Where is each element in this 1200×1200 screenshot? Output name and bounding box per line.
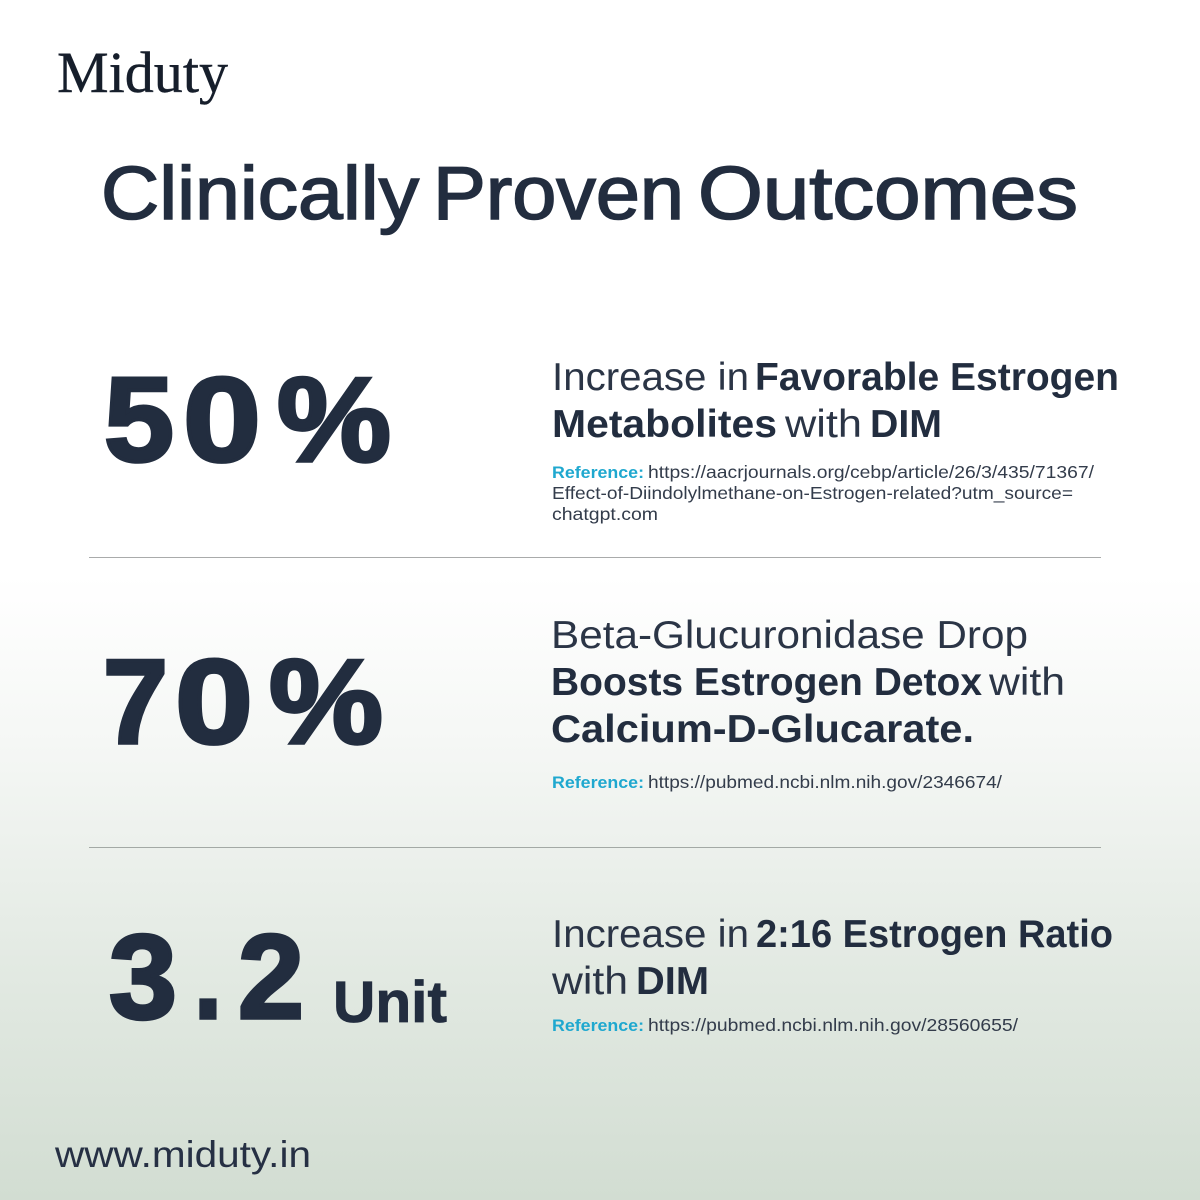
description: beta-glucuronidase drop: with [988, 661, 1065, 704]
reference: aacrjournals [552, 462, 1094, 524]
reference: aacrjournals: https://aacrjournals.org/cebp/article/26/3/435/71367/ [648, 462, 1094, 482]
stat number: 50%: 5 [104, 353, 174, 487]
description: favorable estrogen metabolites [552, 356, 1119, 446]
reference: pubmed 28560655: Reference: [552, 1016, 644, 1035]
reference: aacrjournals: Reference: [552, 463, 644, 482]
reference: pubmed 28560655: https://pubmed.ncbi.nlm.nih.gov/28560655/ [648, 1015, 1018, 1035]
reference: pubmed 2346674: Reference: [552, 773, 644, 792]
stat number: 3.2: 3 [109, 910, 177, 1044]
stat number: 70% [103, 635, 383, 769]
title: Clinically [101, 151, 420, 235]
title: Outcomes [698, 151, 1078, 235]
stat number: 3.2: . [194, 910, 222, 1044]
stat number: 70%: 7 [103, 635, 168, 769]
reference: aacrjournals: Effect-of-Diindolylmethane-on-Estrogen-related?utm_source= [552, 483, 1073, 504]
website url: www.miduty.in [54, 1134, 311, 1175]
description: 2:16 estrogen ratio: with [551, 960, 628, 1003]
description: beta-glucuronidase drop: Boosts Estrogen Detox [551, 661, 982, 704]
stat number: 70%: 0 [175, 635, 253, 769]
description: 2:16 estrogen ratio: DIM [636, 960, 709, 1003]
logo: Miduty: Miduty [57, 40, 228, 105]
stat row 3: 3.2 Unit [109, 910, 1113, 1044]
description: favorable estrogen metabolites: Favorable Estrogen [755, 356, 1119, 399]
stat number: 3.2 [109, 910, 304, 1044]
stat unit: Unit: Unit [333, 970, 447, 1035]
description: beta-glucuronidase drop [551, 614, 1065, 751]
description: 2:16 estrogen ratio: Increase in [552, 913, 749, 956]
description: favorable estrogen metabolites: DIM [870, 403, 942, 446]
title [101, 151, 1078, 235]
stat number: 70%: % [269, 635, 383, 769]
description: beta-glucuronidase drop: Beta-Glucuronidase Drop [551, 614, 1028, 657]
description: favorable estrogen metabolites: Increase in [552, 356, 749, 399]
stat number: 50%: % [277, 353, 391, 487]
stat row 1: 50% [104, 353, 1119, 524]
description: favorable estrogen metabolites: Metabolites [552, 403, 777, 446]
description: beta-glucuronidase drop: Calcium-D-Glucarate. [551, 708, 974, 751]
stat number: 50%: 0 [183, 353, 261, 487]
stat number: 50% [104, 353, 391, 487]
reference: pubmed 2346674: https://pubmed.ncbi.nlm.nih.gov/2346674/ [648, 772, 1002, 792]
stat number: 3.2: 2 [238, 910, 304, 1044]
reference: aacrjournals: chatgpt.com [552, 504, 658, 524]
description: 2:16 estrogen ratio: 2:16 Estrogen Ratio [756, 913, 1113, 956]
description: 2:16 estrogen ratio [551, 913, 1113, 1003]
title: Proven [433, 151, 684, 235]
description: favorable estrogen metabolites: with [784, 403, 862, 446]
stat row 2: 70% [103, 614, 1065, 792]
